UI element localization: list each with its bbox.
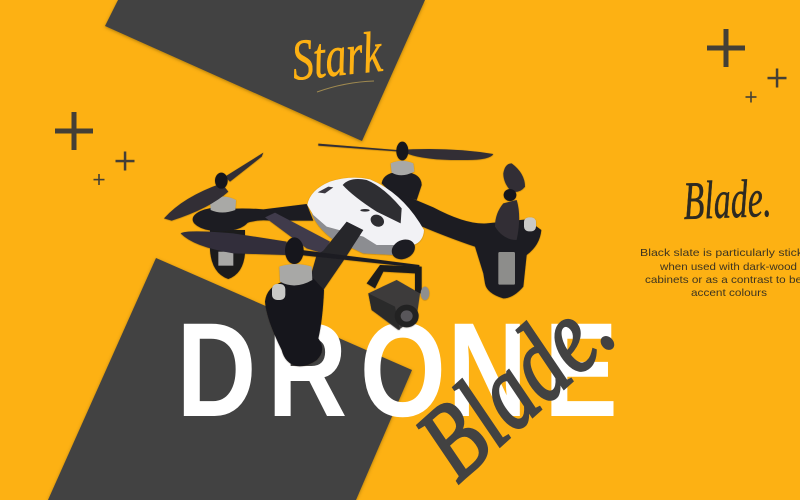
icon: plus signs right xyxy=(707,29,786,102)
right rotor xyxy=(495,163,525,240)
icon: plus signs left xyxy=(55,112,134,185)
rear right rotor pod xyxy=(318,142,493,200)
body shell xyxy=(307,178,424,290)
rear left rotor xyxy=(164,153,263,221)
script heading: Stark: Stark xyxy=(289,19,386,93)
description text: accent colours xyxy=(691,287,767,299)
rear left pod xyxy=(210,230,245,279)
description text: when used with dark-wood xyxy=(659,261,797,273)
front rotor and pod xyxy=(181,231,419,366)
drone illustration xyxy=(164,142,541,366)
camera gimbal xyxy=(367,265,429,330)
description text: Black slate is particularly stick xyxy=(640,247,800,259)
title: DRONE: DRONE xyxy=(176,296,618,445)
panel: top dark shape xyxy=(105,0,425,141)
description text: cabinets or as a contrast to be xyxy=(645,274,800,286)
description text xyxy=(640,247,800,299)
panel: bottom dark shape xyxy=(48,258,412,500)
script overlay: large Blade.: Blade. xyxy=(394,268,636,500)
frame arms xyxy=(193,188,541,298)
